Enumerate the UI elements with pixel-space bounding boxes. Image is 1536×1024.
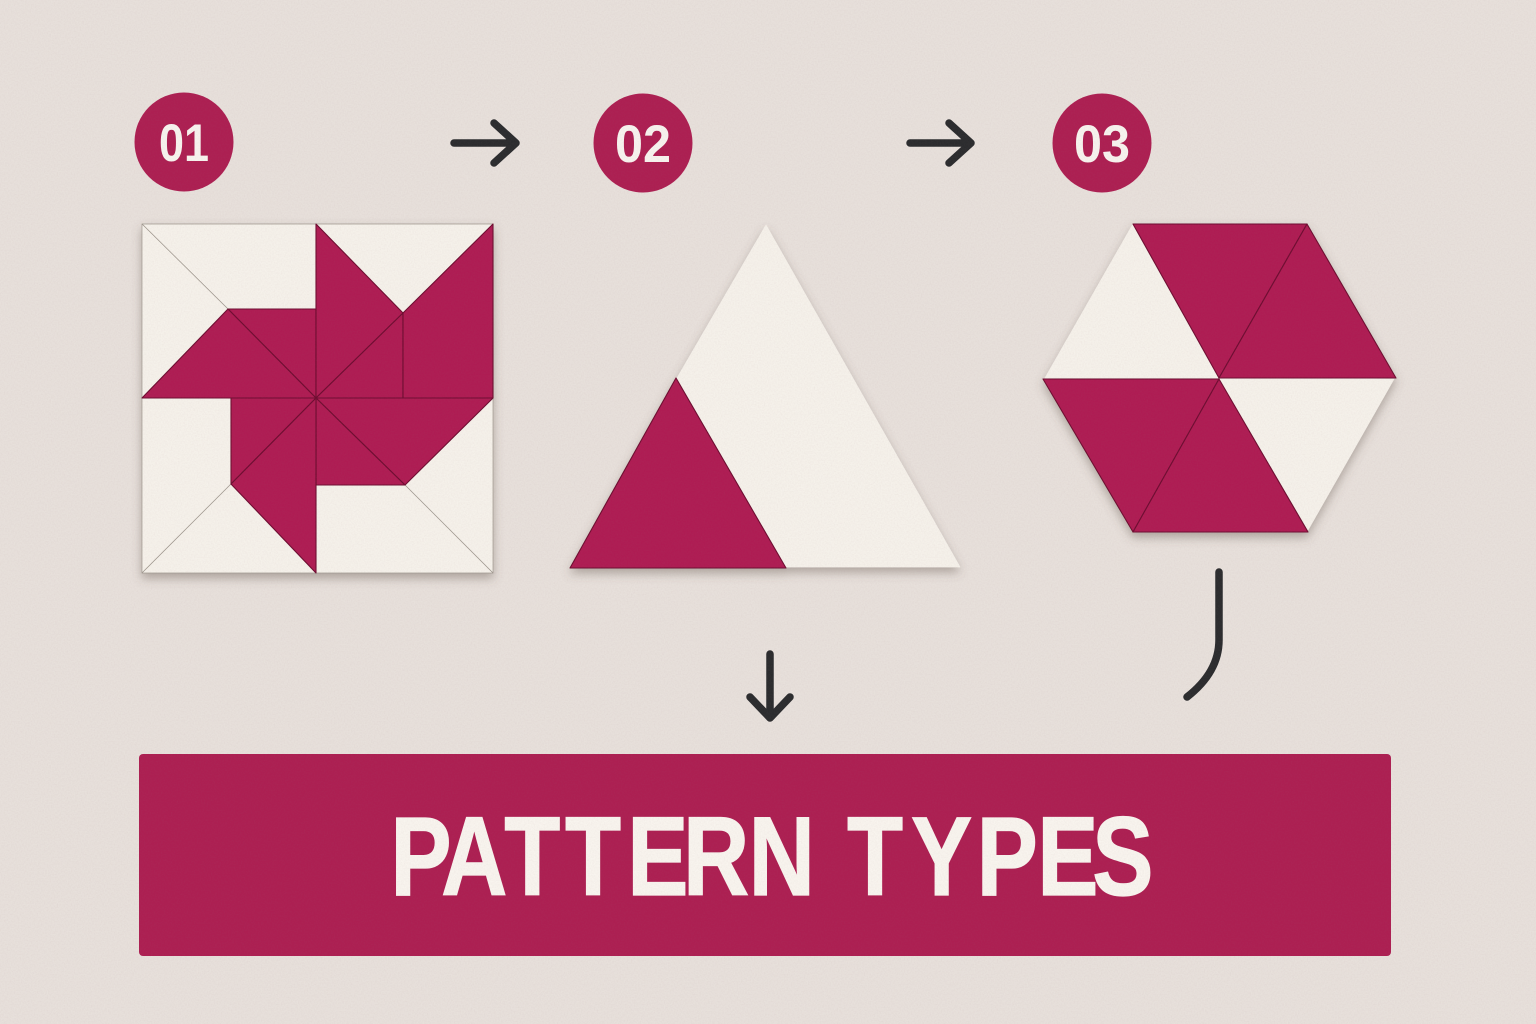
banner: pattern types: PATTERN TYPES — [390, 793, 1153, 919]
arrow: curved line from hexagon to banner — [1187, 572, 1219, 697]
panel: hexagon pattern — [1043, 224, 1396, 532]
crimson hexagon pieces — [1043, 224, 1396, 532]
arrow: step 01 to step 02 — [454, 123, 516, 163]
badge: step 01 — [134, 92, 234, 192]
badge: step 02 — [594, 94, 692, 192]
cream square pieces — [142, 224, 493, 573]
badge: step 01: 01 — [159, 114, 209, 173]
panel: triangle pattern — [570, 225, 960, 568]
cream triangle piece — [677, 225, 960, 567]
arrow: triangle down to banner — [750, 654, 790, 718]
arrow: step 02 to step 03 — [910, 123, 971, 163]
banner: pattern types — [139, 754, 1391, 956]
crimson pinwheel pieces — [142, 224, 493, 573]
cream hexagon pieces — [1045, 224, 1394, 530]
badge: step 02: 02 — [615, 115, 671, 174]
crimson triangle piece — [570, 378, 786, 568]
panel: square pinwheel pattern — [142, 224, 493, 573]
badge: step 03: 03 — [1074, 115, 1130, 174]
badge: step 03 — [1052, 94, 1152, 192]
